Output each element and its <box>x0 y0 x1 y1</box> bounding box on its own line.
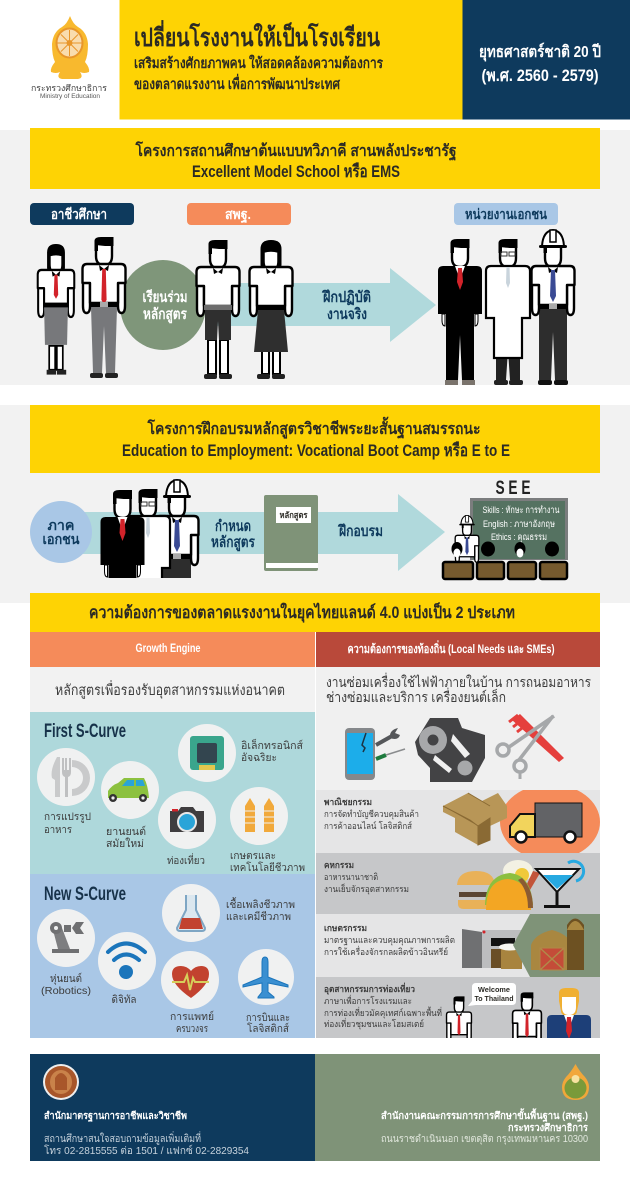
figure: female school student <box>250 240 292 379</box>
arrow: hands-on practice <box>205 268 436 342</box>
panel: New S-Curve <box>30 874 315 1038</box>
label: agriculture: เกษตรและ <box>230 850 276 862</box>
icon: phone repair <box>345 728 405 780</box>
icon: barn and silo on green panel <box>513 914 600 977</box>
arrow: hands-on practice: ฝึกปฏิบัติ <box>321 288 371 306</box>
icon: boxes <box>443 793 507 845</box>
text: agriculture: มาตรฐานและควบคุมคุณภาพการผลิต <box>324 935 455 946</box>
icon: robotics <box>37 909 95 967</box>
text: training: ฝึกอบรม <box>338 522 383 540</box>
icon: cocktail <box>536 861 584 908</box>
pill: vocational education <box>30 203 134 225</box>
column header: Growth Engine: Growth Engine <box>136 641 201 655</box>
banner: EMS title <box>30 128 600 189</box>
text: home economics: งานเย็บจักรอุตสาหกรรม <box>324 882 409 895</box>
panel: New S-Curve: โลจิสติกส์ <box>247 1022 290 1035</box>
icon: tourism camera <box>158 791 216 849</box>
banner: E to E title: โครงการฝึกอบรมหลักสูตรวิชาชีพระยะสั้นฐานสมรรถนะ <box>147 416 481 440</box>
icon: egg and bacon <box>503 860 540 890</box>
circle: joint curriculum: เรียนร่วม <box>142 289 188 306</box>
text block: future industry curricula: หลักสูตรเพื่อรองรับอุตสาหกรรมแห่งอนาคต <box>55 680 285 699</box>
panel: First S-Curve: สมัยใหม่ <box>106 837 144 850</box>
seal: OBEC <box>562 1064 589 1100</box>
text: contact: สำนักมาตรฐานการอาชีพและวิชาชีพ <box>44 1110 187 1122</box>
text: home economics <box>324 860 409 895</box>
text: local needs list: ช่างซ่อมและบริการ เครื่องยนต์เล็ก <box>326 688 506 705</box>
text: tourism: การท่องเที่ยวมัคคุเทศก์เฉพาะพื้นที่ <box>324 1006 442 1019</box>
figure: vocational male student <box>82 237 126 378</box>
circle: private sector: ภาค <box>48 517 74 533</box>
text: tourism: ท่องเที่ยวชุมชนและโฮมสเตย์ <box>324 1017 424 1030</box>
header title panel: เปลี่ยนโรงงานให้เป็นโรงเรียน <box>134 20 380 52</box>
callout: welcome bubble: To Thailand <box>474 996 514 1003</box>
icon: rice machine <box>462 929 522 969</box>
footer: OBEC <box>315 1054 600 1161</box>
label: food processing: การแปรรูป <box>44 811 91 823</box>
figure: scientist <box>486 239 530 385</box>
icon: biofuel flask <box>162 884 220 942</box>
header strategy panel: (พ.ศ. 2560 - 2579) <box>482 66 598 85</box>
panel: New S-Curve: และเคมีชีวภาพ <box>226 910 291 923</box>
pill: OBEC: สพฐ. <box>225 206 251 224</box>
figures: guides and tourist <box>446 988 591 1038</box>
section background: E to E <box>0 405 630 603</box>
icon: delivery truck <box>510 803 582 842</box>
label: digital: ดิจิทัล <box>112 994 136 1006</box>
panel: First S-Curve: เทคโนโลยีชีวภาพ <box>230 861 305 874</box>
label: modern car: ยานยนต์ <box>106 825 146 838</box>
text: commerce <box>324 797 419 831</box>
header title panel <box>120 0 462 120</box>
circle: private sector: เอกชน <box>42 531 80 547</box>
icon: medical heart <box>161 951 219 1009</box>
row: agriculture <box>316 914 600 977</box>
text: commerce: พาณิชยกรรม <box>324 797 372 807</box>
icon: aviation plane <box>238 949 294 1005</box>
text: define curriculum: กำหนด <box>215 518 251 535</box>
figure: businessman <box>438 239 482 385</box>
blackboard: SEE skills: Skills : ทักษะ การทำงาน <box>482 505 560 516</box>
icon: burger <box>457 871 496 909</box>
banner: labour market demand <box>30 593 600 632</box>
panel: New S-Curve: ครบวงจร <box>176 1023 208 1035</box>
text: local needs list: งานซ่อมเครื่องใช้ไฟฟ้าภายในบ้าน การถนอมอาหาร <box>326 673 591 690</box>
text: agriculture: การใช้เครื่องจักรกลผลิตข้าวอินทรีย์ <box>324 945 448 957</box>
text: tourism: อุตสาหกรรมการท่องเที่ยว <box>324 982 415 995</box>
heading: New S-Curve: New S-Curve <box>44 884 126 905</box>
row: home economics <box>316 853 600 914</box>
icon: agriculture wheat <box>230 787 288 845</box>
icon: taco <box>485 873 533 910</box>
label: medical: การแพทย์ <box>170 1010 214 1023</box>
header title panel: เสริมสร้างศักยภาพคน ให้สอดคล้องความต้องการ <box>134 54 383 72</box>
icon: food processing <box>37 748 95 806</box>
label: tourism: ท่องเที่ยว <box>167 853 205 867</box>
panel: First S-Curve: อาหาร <box>44 824 72 836</box>
blackboard: SEE skills <box>470 498 568 560</box>
panel: New S-Curve: (Robotics) <box>41 985 91 997</box>
text: contact <box>44 1110 249 1157</box>
figure: male school student <box>196 240 240 379</box>
text: address: สำนักงานคณะกรรมการการศึกษาขั้นพื้นฐาน (สพฐ.) <box>381 1108 588 1122</box>
label: biofuel: เชื้อเพลิงชีวภาพ <box>226 897 295 911</box>
panel: local needs services <box>316 667 600 790</box>
icon: small engine <box>415 718 485 782</box>
pill: private sector: หน่วยงานเอกชน <box>465 206 547 222</box>
section background: EMS <box>0 130 630 385</box>
text: agriculture: เกษตรกรรม <box>324 923 367 933</box>
blackboard: SEE skills: Ethics : คุณธรรม <box>491 532 547 543</box>
banner: E to E title <box>30 405 600 473</box>
figures: private sector trio <box>100 479 200 578</box>
heading: First S-Curve: First S-Curve <box>44 721 126 742</box>
callout: welcome bubble <box>468 983 516 1006</box>
pill: private sector <box>454 203 558 225</box>
panel: First S-Curve <box>30 712 315 874</box>
figure: teacher and audience <box>443 516 567 579</box>
pill: vocational education: อาชีวศึกษา <box>51 206 107 222</box>
text block: future industry curricula <box>30 667 315 712</box>
label: robotics: หุ่นยนต์ <box>50 972 82 985</box>
label: smart electronics: อิเล็กทรอนิกส์ <box>241 738 304 752</box>
banner: EMS title: Excellent Model School หรือ EMS <box>192 161 400 181</box>
banner: EMS title: โครงการสถานศึกษาต้นแบบทวิภาคี สานพลังประชารัฐ <box>135 140 457 161</box>
icon: smart electronics <box>178 724 236 782</box>
arrow: hands-on practice: งานจริง <box>327 305 367 323</box>
pill: OBEC <box>187 203 291 225</box>
row: tourism <box>316 977 600 1038</box>
text: define curriculum: หลักสูตร <box>211 534 256 552</box>
text: address <box>381 1108 589 1145</box>
icon: modern car <box>101 761 159 819</box>
footer: vocational standards office <box>30 1054 315 1161</box>
text: contact: โทร 02-2815555 ต่อ 1501 / แฟกซ์ 02-2829354 <box>44 1144 249 1157</box>
text: home economics: คหกรรม <box>324 860 354 870</box>
figure: vocational female student <box>38 244 74 375</box>
text: local needs list <box>326 673 591 705</box>
label: aviation: การบินและ <box>246 1012 290 1024</box>
column header: Local Needs: ความต้องการของท้องถิ่น (Local Needs และ SMEs) <box>348 640 554 656</box>
row: commerce <box>316 790 600 853</box>
blackboard: SEE skills: English : ภาษาอังกฤษ <box>483 519 555 530</box>
header logo: Ministry of Education <box>31 16 107 100</box>
panel: First S-Curve: อัจฉริยะ <box>241 752 277 764</box>
icon: curriculum book: หลักสูตร <box>280 510 308 521</box>
circle: joint curriculum: หลักสูตร <box>143 306 188 324</box>
text: contact: สถานศึกษาสนใจสอบถามข้อมูลเพิ่มเติมที่ <box>44 1131 201 1145</box>
icon: digital wifi <box>98 932 156 990</box>
text: address: ถนนราชดำเนินนอก เขตดุสิต กรุงเทพมหานคร 10300 <box>381 1134 588 1145</box>
icon: comb and scissors <box>497 714 564 779</box>
column header: Growth Engine <box>30 632 315 667</box>
text: commerce: การจัดทำบัญชีควบคุมสินค้า <box>324 809 419 820</box>
header strategy panel <box>462 0 630 120</box>
callout: welcome bubble: Welcome <box>478 987 510 994</box>
header logo: Ministry of Education: Ministry of Education <box>40 94 100 100</box>
header logo: Ministry of Education: กระทรวงศึกษาธิการ <box>31 83 107 93</box>
figure: engineer <box>532 230 574 385</box>
column header: Local Needs <box>316 632 600 667</box>
banner: E to E title: Education to Employment: Vocational Boot Camp หรือ E to E <box>122 440 510 460</box>
circle: private sector <box>30 501 92 563</box>
heading: SEE: S E E <box>496 478 530 499</box>
text: define curriculum <box>211 518 256 552</box>
text: home economics: อาหารนานาชาติ <box>324 872 378 882</box>
text: commerce: การค้าออนไลน์ โลจิสติกส์ <box>324 820 412 831</box>
text: tourism: ภาษาเพื่อการโรงแรมและ <box>324 994 412 1006</box>
banner: labour market demand: ความต้องการของตลาดแรงงานในยุคไทยแลนด์ 4.0 แบ่งเป็น 2 ประเภท <box>89 601 515 623</box>
circle: joint curriculum <box>120 260 206 350</box>
icon: curriculum book <box>264 495 318 571</box>
text: tourism <box>324 982 442 1030</box>
seal: vocational office <box>43 1064 79 1100</box>
header title panel: ของตลาดแรงงาน เพื่อการพัฒนาประเทศ <box>134 73 341 93</box>
text: address: กระทรวงศึกษาธิการ <box>508 1122 589 1134</box>
header strategy panel: ยุทธศาสตร์ชาติ 20 ปี <box>479 42 601 62</box>
text: agriculture <box>324 923 455 957</box>
arrow: curriculum to training <box>80 494 445 571</box>
